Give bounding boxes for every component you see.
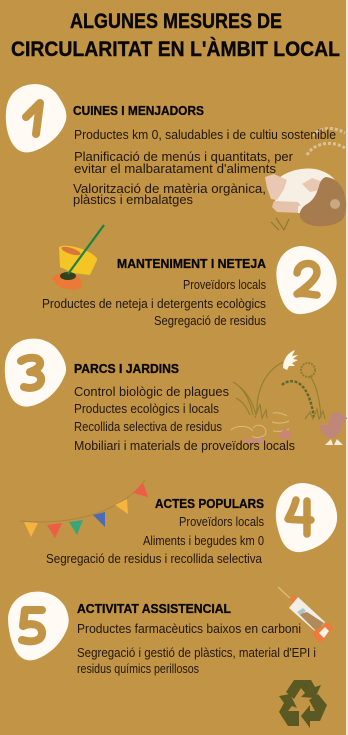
number blob 1 [6, 84, 66, 152]
heading: ACTIVITAT ASSISTENCIAL [77, 602, 231, 616]
section 1 [6, 84, 336, 207]
icon: recycling symbol [279, 680, 327, 728]
section 4 [20, 480, 337, 566]
section 2 [42, 225, 337, 328]
number blob 3 [5, 339, 66, 407]
list [74, 385, 295, 453]
list: evitar el malbaratament d'aliments [74, 162, 276, 176]
heading: PARCS I JARDINS [74, 362, 179, 376]
icon: mop and bucket [52, 225, 104, 290]
list: Productes ecològics i locals [74, 402, 219, 416]
list: Productes de neteja i detergents ecològics [42, 297, 266, 311]
heading: MANTENIMENT I NETEJA [117, 257, 266, 271]
heading: CUINES I MENJADORS [73, 104, 204, 118]
list: Productes farmacèutics baixos en carboni [77, 622, 301, 636]
number blob 4 [276, 483, 337, 552]
list [42, 278, 266, 328]
section 3 [5, 339, 295, 453]
list [73, 128, 336, 207]
list: Planificació de menús i quantitats, per [74, 150, 293, 164]
list: residus químics perillosos [77, 662, 199, 676]
section 5 [8, 587, 333, 676]
list: Recollida selectiva de residus [74, 420, 222, 434]
icon: syringe [278, 587, 333, 642]
list: Segregació de residus [154, 314, 266, 328]
list: Proveïdors locals [183, 278, 266, 292]
illustration: plants and ducks [231, 350, 348, 445]
list [77, 622, 316, 676]
number blob 2 [276, 246, 337, 314]
number blob 5 [8, 592, 69, 660]
list: Valorització de matèria orgànica, [73, 182, 266, 196]
illustration: sheep [265, 128, 346, 230]
list: Mobiliari i materials de proveïdors locals [74, 439, 295, 453]
list: Productes km 0, saludables i de cultiu sostenible [74, 128, 336, 142]
list: plàstics i embalatges [73, 193, 193, 207]
title: ALGUNES MESURES DE [70, 10, 282, 33]
list: Control biològic de plagues [74, 385, 229, 399]
list: Segregació de residus i recollida selectiva [46, 552, 262, 566]
list [46, 515, 264, 566]
heading: ACTES POPULARS [155, 497, 264, 511]
title [11, 10, 340, 61]
list: Aliments i begudes km 0 [143, 534, 264, 548]
list: Segregació i gestió de plàstics, material d'EPI i [77, 646, 316, 660]
list: Proveïdors locals [179, 515, 264, 529]
illustration: bunting [20, 480, 148, 538]
